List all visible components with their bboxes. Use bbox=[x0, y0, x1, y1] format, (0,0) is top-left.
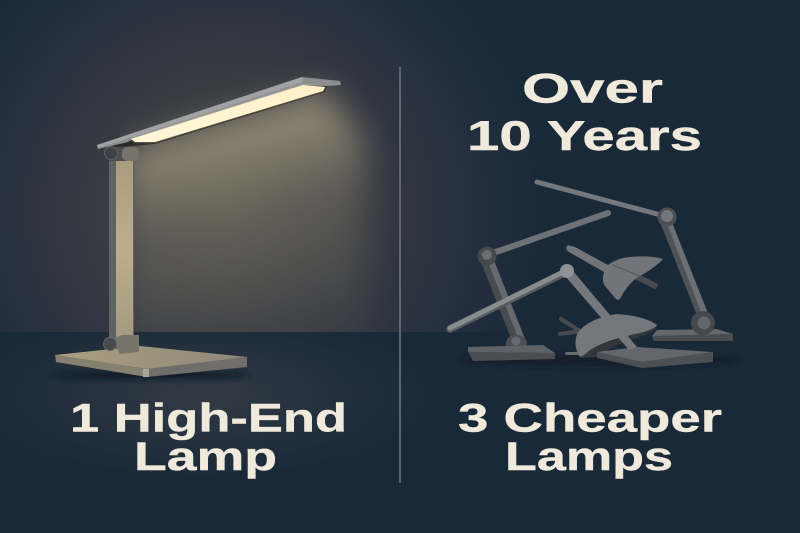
front lamp arm bbox=[450, 264, 637, 350]
label: 1 high-end lamp: Lamp bbox=[134, 435, 277, 479]
label: 1 high-end lamp: 1 High-End bbox=[70, 396, 347, 440]
divider bbox=[399, 67, 401, 483]
glowing light panel bbox=[131, 85, 325, 142]
label: 3 cheaper lamps: Lamps bbox=[505, 435, 673, 479]
lamp head bbox=[97, 77, 341, 149]
broken shade stub bbox=[560, 319, 583, 355]
lower hinge bbox=[104, 335, 139, 354]
heading: over 10 years bbox=[467, 64, 702, 159]
floating shade bbox=[566, 245, 663, 300]
floor shadow bbox=[460, 354, 740, 366]
heading: over 10 years: 10 Years bbox=[467, 112, 702, 159]
back right lamp bbox=[537, 182, 733, 341]
upper hinge bbox=[104, 146, 139, 161]
label: 3 cheaper lamps: 3 Cheaper bbox=[458, 396, 722, 440]
back left lamp bbox=[468, 213, 608, 361]
panel: broken cheap lamps bbox=[450, 182, 740, 368]
collapsed base bbox=[597, 347, 713, 368]
panel: high-end lamp bbox=[50, 77, 365, 379]
light beam bbox=[125, 90, 365, 350]
lamp base bbox=[55, 346, 247, 377]
heading: over 10 years: Over bbox=[522, 64, 663, 112]
label: 3 cheaper lamps bbox=[458, 396, 722, 479]
label: 1 high-end lamp bbox=[70, 396, 347, 479]
collapsed dome shade bbox=[575, 314, 657, 358]
lamp base shadow bbox=[50, 371, 250, 379]
lamp stem bbox=[109, 158, 134, 338]
